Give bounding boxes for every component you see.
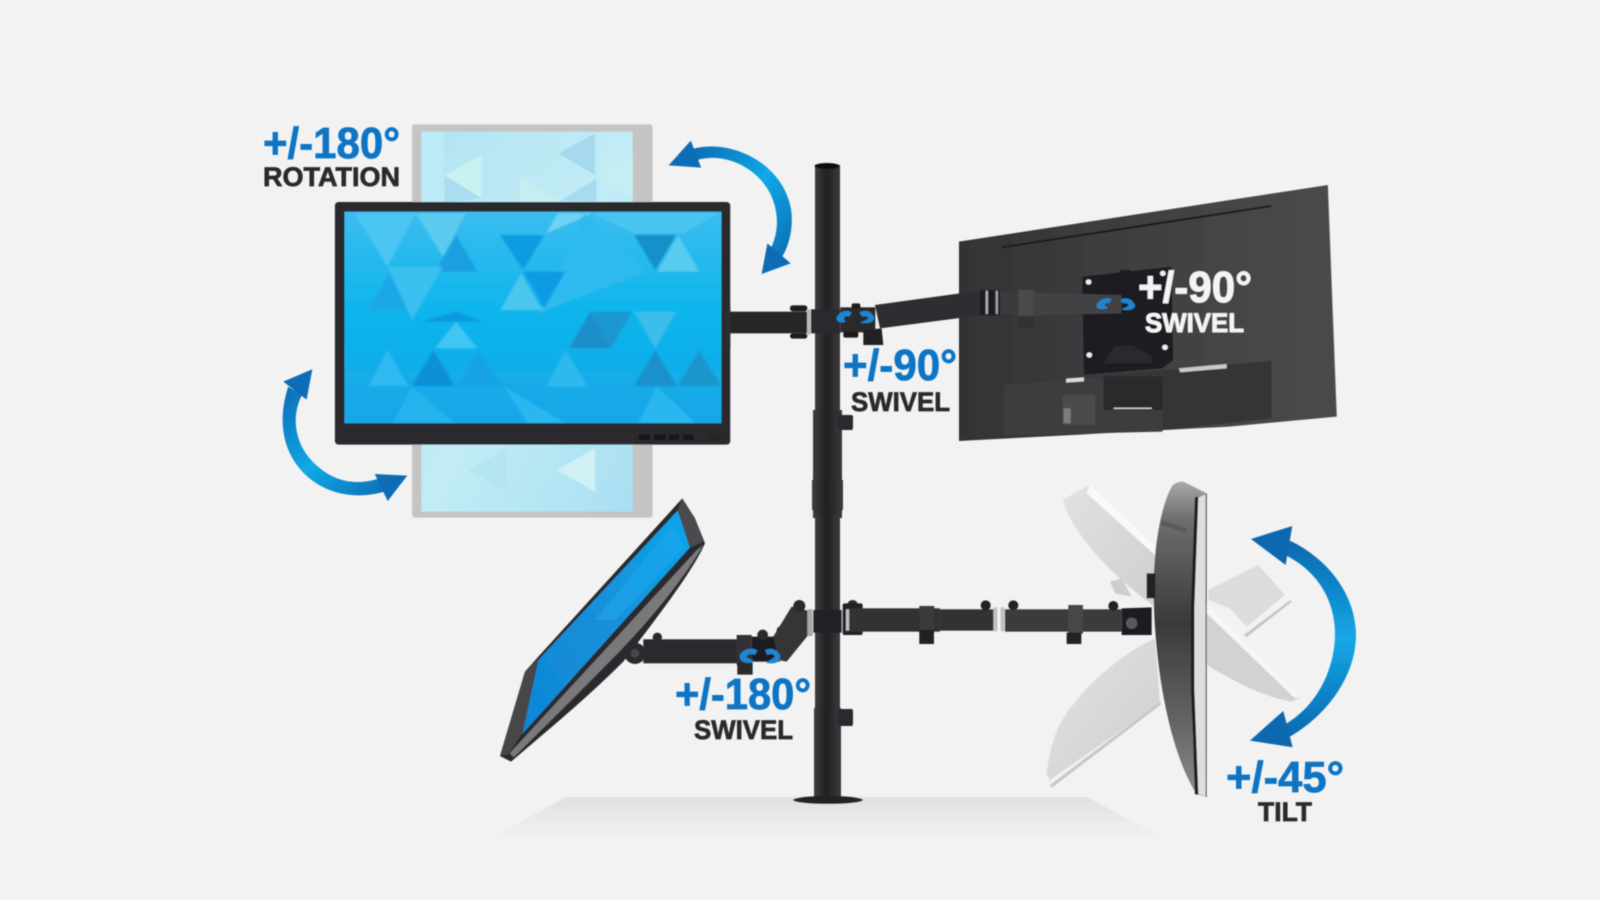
icon: swivel arrows lower left <box>740 649 780 663</box>
icon: swivel arrows near pole <box>837 311 874 323</box>
VESA plate <box>1082 267 1173 375</box>
label: rotation <box>263 119 400 192</box>
label: upper arm swivel: SWIVEL <box>851 387 950 417</box>
landscape monitor bezel <box>335 202 730 445</box>
tilted monitor screen <box>522 511 690 734</box>
lower housing <box>1004 361 1271 435</box>
lower right arm second section <box>940 526 1356 747</box>
right arm to rear monitor <box>840 290 1135 345</box>
cable clips <box>838 415 853 726</box>
arrow: tilt <box>1250 526 1356 747</box>
slot on monitor back <box>1002 206 1271 247</box>
label: rotation: ROTATION <box>263 162 400 192</box>
mounting pole <box>793 163 863 804</box>
rear monitor <box>959 185 1337 441</box>
left arm to monitor <box>725 305 840 348</box>
rear monitor body <box>959 185 1337 441</box>
lower left arm <box>624 600 940 675</box>
infographic artwork and labels <box>263 119 1356 839</box>
label: rotation: +/-180° <box>263 119 400 168</box>
label: tilt: TILT <box>1258 797 1312 827</box>
label: lower arm swivel: SWIVEL <box>694 715 793 745</box>
monitor: upper left <box>283 141 792 501</box>
label: lower arm swivel <box>675 670 811 745</box>
label: upper arm swivel: +/-90° <box>843 341 957 390</box>
tilted monitor lower left <box>500 498 705 762</box>
label: monitor swivel: +/-90° <box>1138 263 1252 312</box>
label: monitor swivel <box>1138 263 1252 338</box>
lower left extension arm <box>624 600 842 675</box>
arrow: rotation lower left <box>283 369 407 501</box>
label: monitor swivel: SWIVEL <box>1145 308 1244 338</box>
monitor screen with triangles <box>344 212 721 423</box>
label: upper arm swivel <box>843 341 957 417</box>
side view monitor <box>1154 482 1207 797</box>
label: lower arm swivel: +/-180° <box>675 670 811 719</box>
connector recess <box>1104 377 1162 410</box>
pole base plate <box>793 796 863 804</box>
ghost monitor tilted up <box>1063 484 1302 702</box>
icon: swivel arrows near monitor <box>1097 298 1135 310</box>
ghost portrait monitor <box>412 124 653 518</box>
arrow: rotation upper right <box>669 141 792 274</box>
upper extension arms <box>725 290 1135 348</box>
white cable tags <box>1179 364 1227 372</box>
tilt monitors <box>1047 482 1302 797</box>
ghost monitor tilted down <box>1047 565 1292 788</box>
label: tilt <box>1226 753 1344 827</box>
lower right arm first section <box>843 600 940 644</box>
label: tilt: +/-45° <box>1226 753 1344 802</box>
monitor buttons <box>639 434 721 440</box>
product label <box>1062 395 1095 425</box>
desk surface <box>490 797 1165 839</box>
